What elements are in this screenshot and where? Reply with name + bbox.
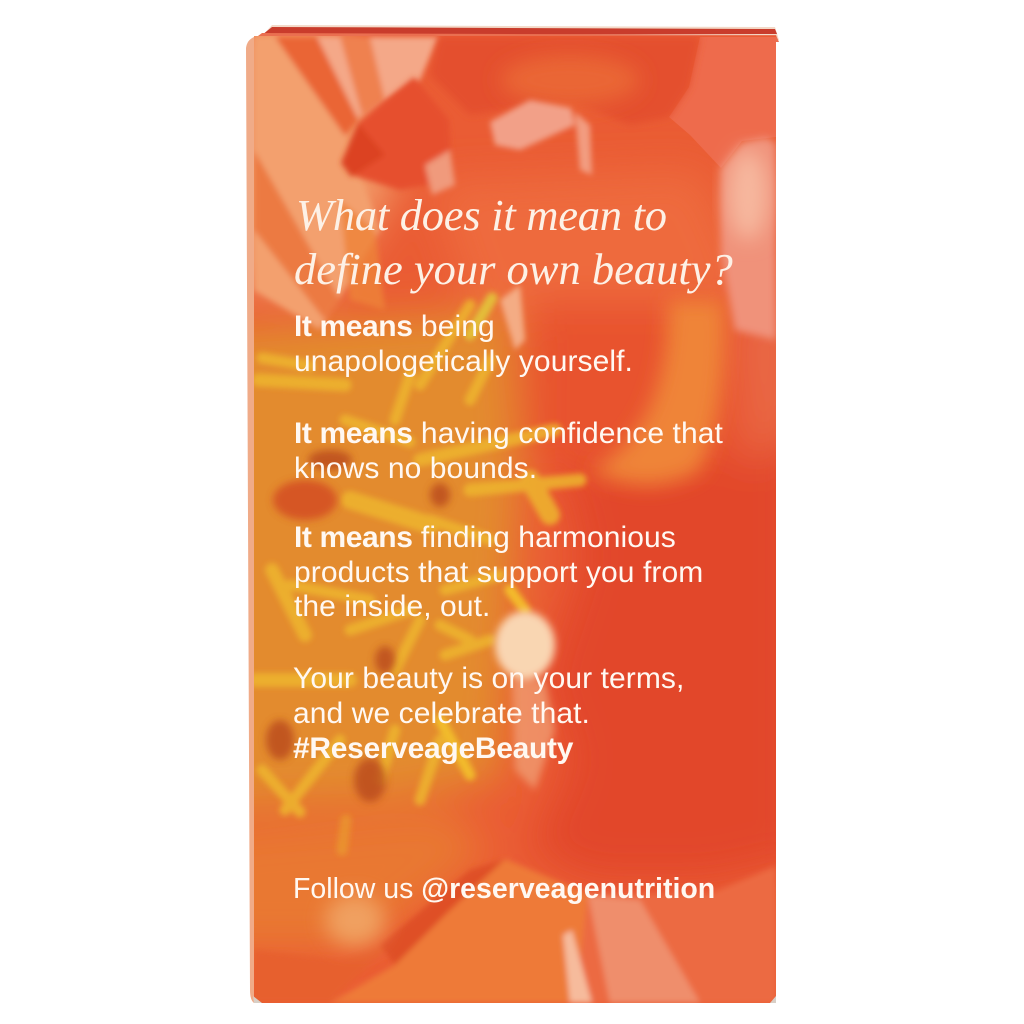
paragraph 3: the inside, out. [294, 590, 490, 623]
paragraph 3 [294, 521, 703, 623]
top right flat panel [669, 37, 776, 168]
orange curved petal band [590, 300, 725, 485]
paragraph 4 with hashtag: Your beauty is on your terms, [293, 662, 684, 695]
soft highlight lower left [325, 894, 385, 946]
social follow line: Follow us @reserveagenutrition [293, 873, 715, 905]
pale flower centre [495, 611, 555, 790]
paragraph 3: products that support you from [294, 556, 703, 588]
box left side panel [246, 37, 254, 1003]
paragraph 1: unapologetically yourself. [294, 345, 633, 378]
yellow stamens [255, 298, 580, 850]
paragraph 4 with hashtag [293, 662, 684, 765]
paragraph 3: It means finding harmonious [294, 521, 676, 554]
paragraph 4 with hashtag: #ReserveageBeauty [293, 732, 573, 765]
heading: define your own beauty? [294, 244, 733, 294]
top dark petal mass [430, 37, 700, 125]
petals bottom [332, 858, 776, 1003]
dark brown shadows among the stamens [266, 450, 450, 802]
paragraph 1: It means being [294, 310, 495, 343]
red flower bud [341, 77, 455, 195]
pale streaks on top petal [490, 100, 592, 350]
paragraph 2 [294, 417, 723, 485]
box bottom corners [253, 996, 776, 1003]
box top flap [250, 25, 779, 42]
upper background and large soft petals [254, 36, 776, 956]
petals top left [254, 36, 439, 330]
paragraph 2: It means having confidence that [294, 417, 723, 450]
paragraph 1 [294, 310, 633, 378]
pale petal at right [721, 137, 776, 340]
heading [294, 190, 733, 294]
paragraph 2: knows no bounds. [294, 452, 537, 485]
heading: What does it mean to [296, 190, 667, 240]
box front face [254, 36, 776, 1003]
product box with flower photograph [246, 25, 779, 1003]
paragraph 4 with hashtag: and we celebrate that. [293, 697, 590, 730]
